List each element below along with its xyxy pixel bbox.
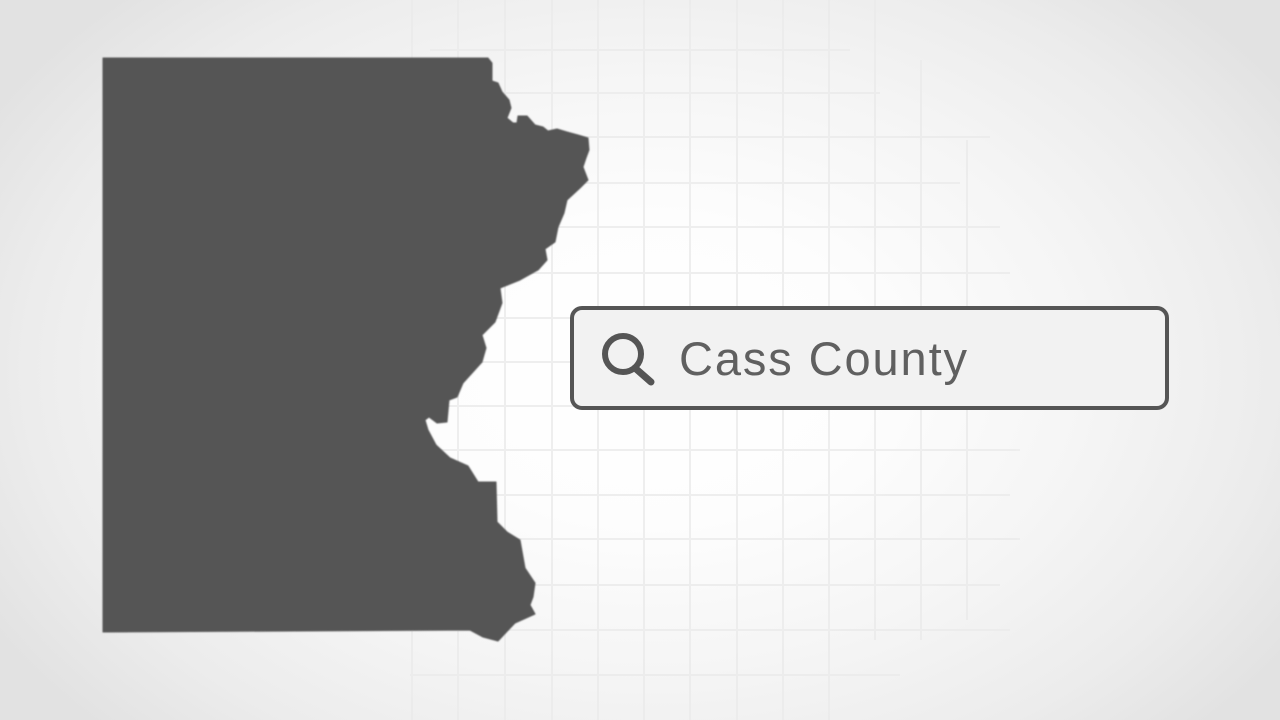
search box	[570, 306, 1169, 410]
county map silhouette	[103, 58, 589, 641]
icon: magnifying glass	[602, 333, 654, 386]
search text: Cass County	[679, 332, 969, 385]
